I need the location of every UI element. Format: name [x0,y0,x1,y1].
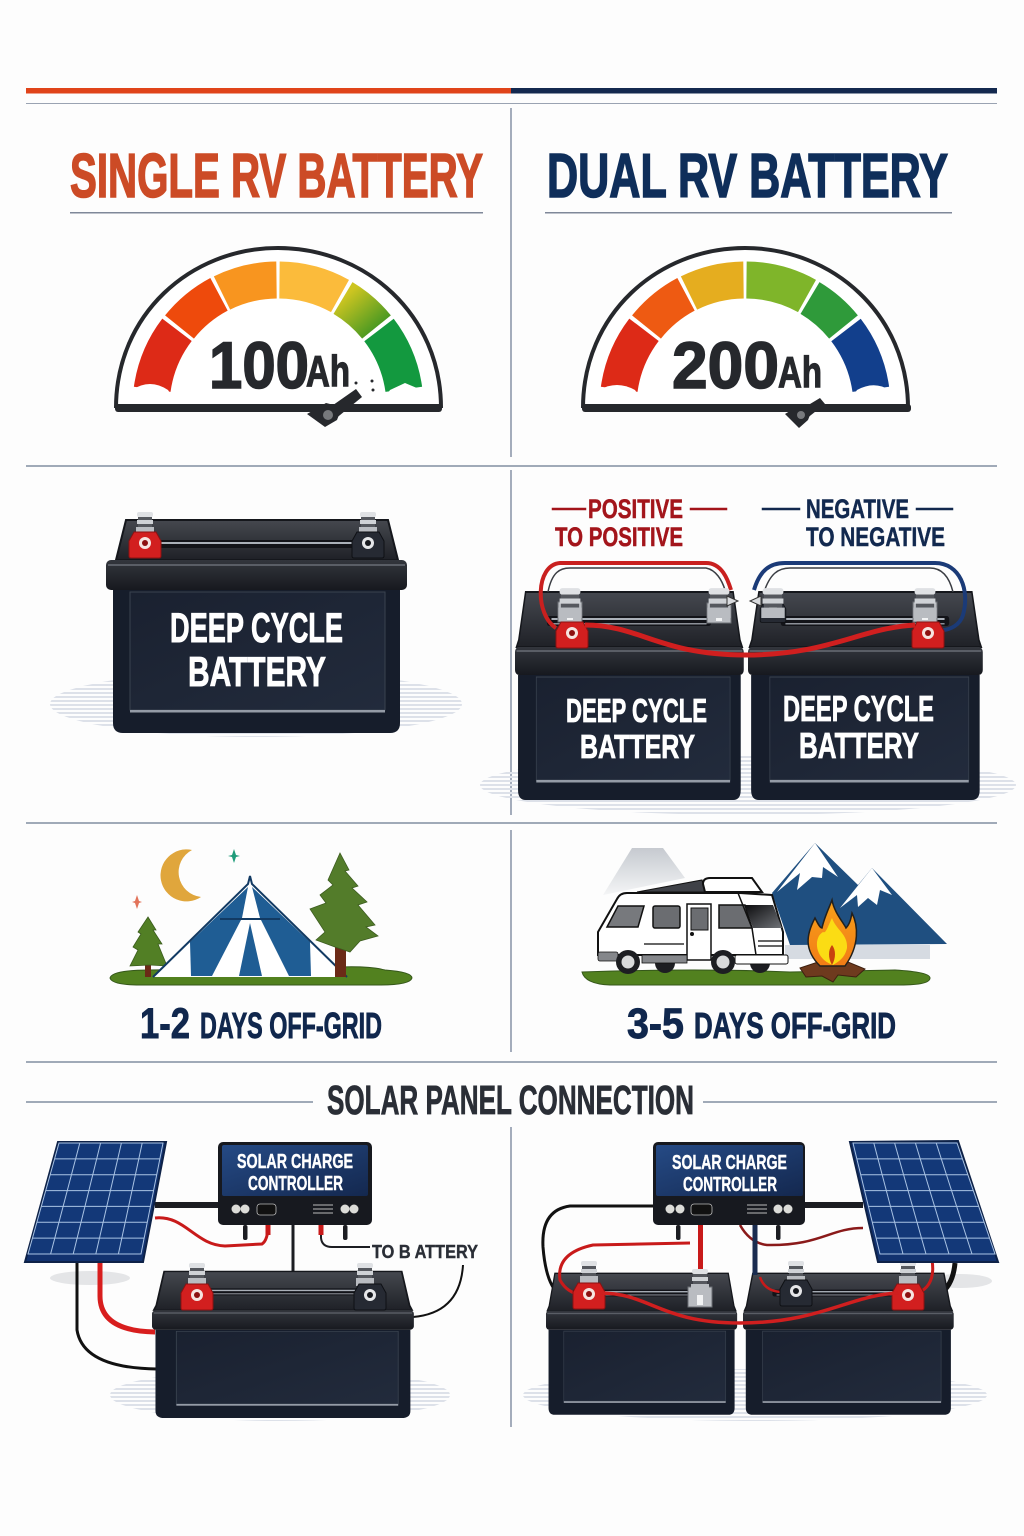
battery: left: DEEP CYCLE [566,692,707,729]
charge controller: CONTROLLER [683,1174,777,1196]
charge controller [653,1142,805,1240]
cable: link between batteries [585,625,915,655]
solar panel [850,1141,998,1262]
battery: right [748,592,983,800]
large tree [310,853,378,977]
label: positive to positive [552,494,727,552]
caption: 3-5 days off-grid: DAYS OFF-GRID [694,1005,896,1046]
caption: 1-2 days off-grid [140,1000,382,1048]
battery [152,1263,414,1418]
gauge needle [785,398,825,428]
label: negative to negative: TO NEGATIVE [806,522,945,552]
terminal: positive [129,512,161,558]
wires front [560,1225,933,1295]
shadow: dual batteries [480,755,1016,815]
caption: 1-2 days off-grid: 1-2 [140,1000,190,1048]
battery label: BATTERY [188,648,326,695]
gauge reading: 200 [672,328,779,402]
battery: right: DEEP CYCLE [783,688,934,729]
battery: left: BATTERY [580,728,695,765]
gauge: 100Ah [115,248,442,427]
shadows: solar section [50,1271,992,1421]
link cable [600,1293,898,1323]
heading: solar panel connection: SOLAR PANEL CONNECTION [327,1077,694,1123]
battery label: DEEP CYCLE [170,604,343,651]
battery: right: BATTERY [799,725,919,766]
solar panel [25,1142,166,1262]
gauge needle [307,380,374,427]
gauge reading: Ah [778,348,822,397]
tent [153,876,347,977]
title: single RV battery: SINGLE RV BATTERY [70,142,483,211]
caption: 3-5 days off-grid: 3-5 [627,1000,684,1048]
battery label [170,604,343,695]
diagram: dual battery solar wiring [543,1141,998,1415]
batteries [546,1273,954,1415]
terminals [573,1261,924,1310]
RV [598,878,788,974]
caption: 3-5 days off-grid [627,1000,896,1048]
gauge: 200Ah [582,248,911,428]
wires [77,1202,463,1369]
charge controller: SOLAR CHARGE [237,1151,353,1173]
caption: 1-2 days off-grid: DAYS OFF-GRID [200,1005,382,1046]
moon [161,849,201,901]
mountains [603,843,947,959]
campfire [800,900,865,982]
charge controller: SOLAR CHARGE [672,1152,787,1174]
gauge reading: Ah [306,347,350,396]
scene: tent camping [110,849,412,985]
terminal: negative [352,512,384,558]
cable: negative arch [754,563,965,630]
battery: single deep cycle [106,512,407,733]
ground [110,967,412,985]
charge controller: CONTROLLER [248,1173,343,1195]
top colour bar [26,88,997,104]
diagram: single battery solar wiring [25,1142,478,1418]
batteries: dual deep cycle wired in parallel [515,563,983,800]
battery: left [515,592,744,800]
scene: RV camping [582,843,947,985]
gauge reading: 100 [209,328,309,402]
terminals [556,588,944,648]
label: to battery: TO B ATTERY [372,1242,478,1262]
label: positive to positive: POSITIVE [588,494,683,524]
shadow: single battery [50,671,462,737]
label: negative to negative: NEGATIVE [806,494,909,524]
stars [132,849,240,909]
label: positive to positive: TO POSITIVE [555,522,683,552]
charge controller [218,1142,372,1240]
small tree [130,917,167,977]
wires behind [543,1202,955,1295]
label: negative to negative [762,494,953,552]
cable: positive arch [541,563,731,628]
ground [582,970,930,985]
